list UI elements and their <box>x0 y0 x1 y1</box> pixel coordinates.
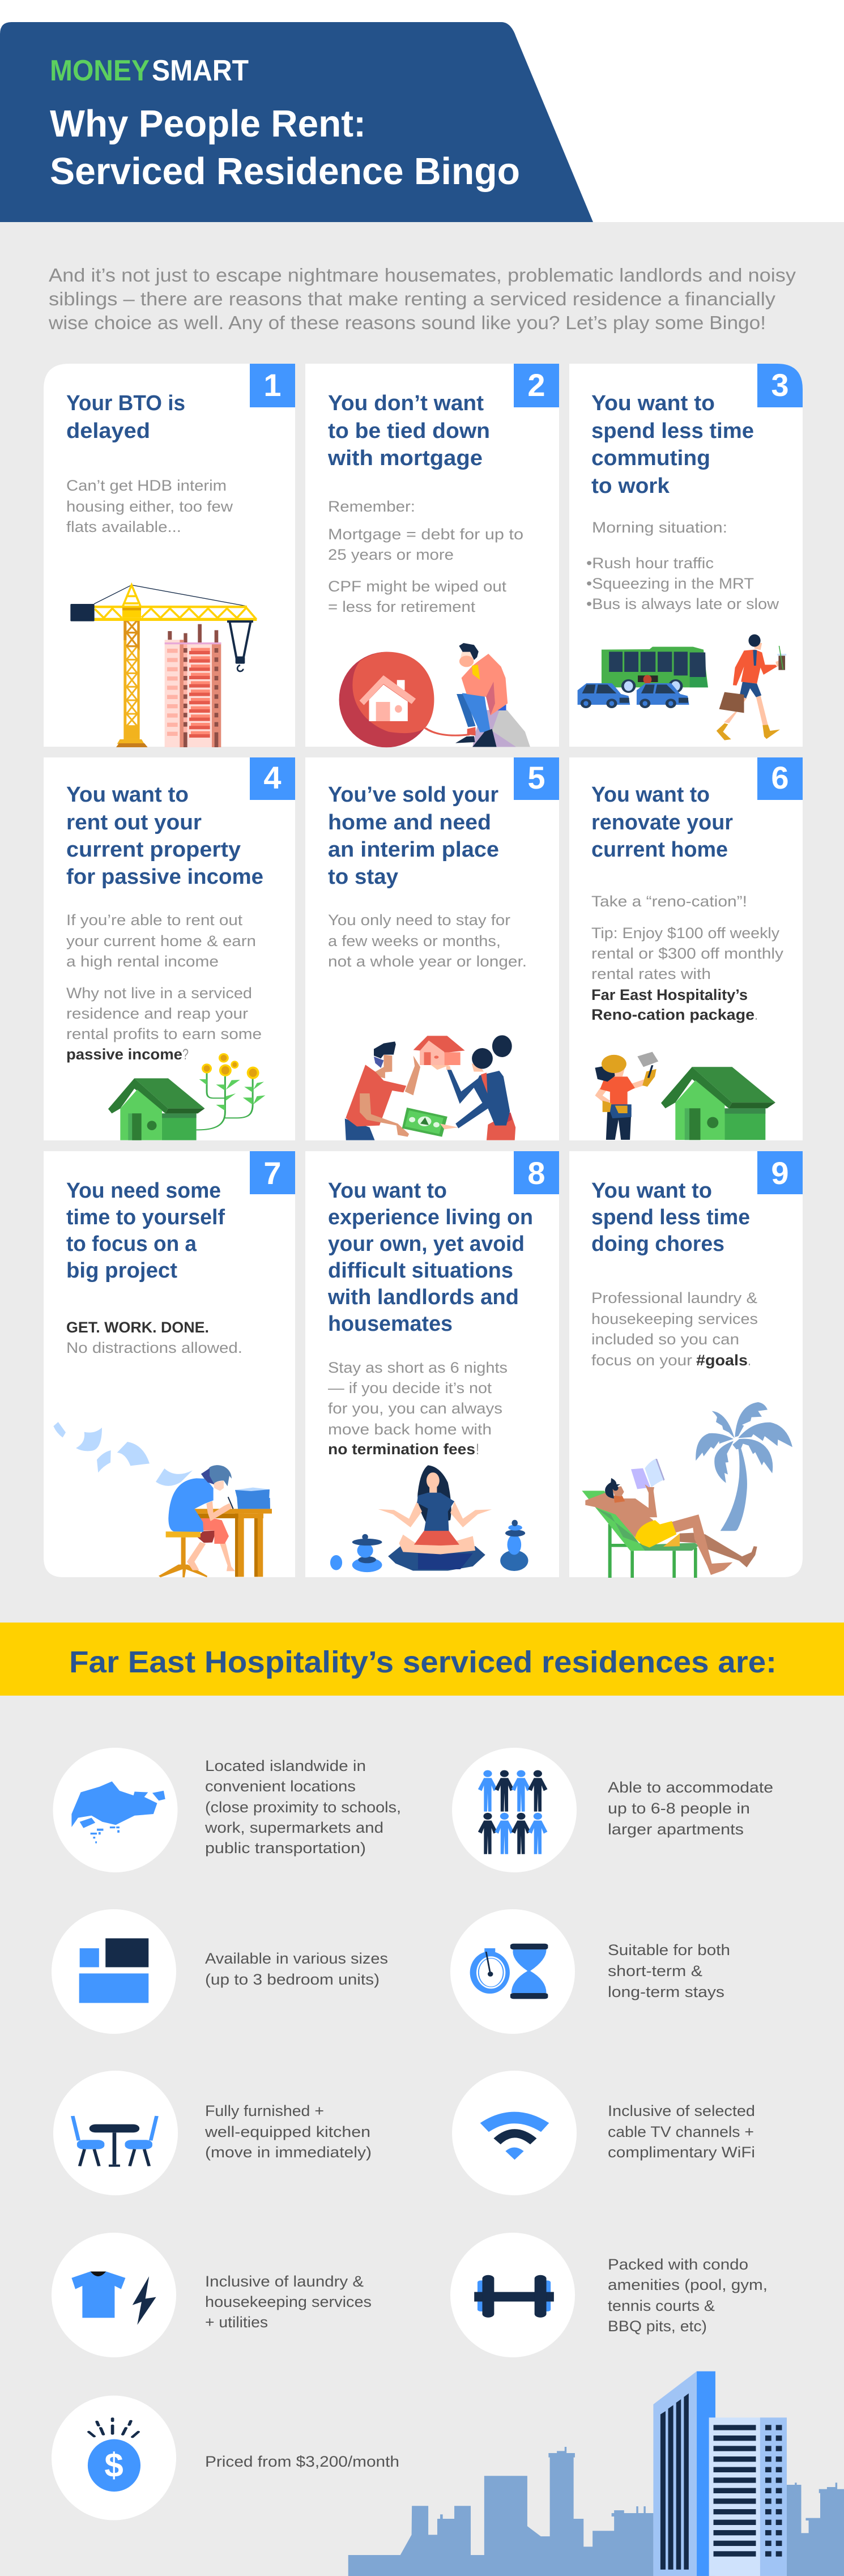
heading: your own, yet avoid <box>328 1232 525 1256</box>
panel: card 8 living on your own <box>305 1151 559 1577</box>
number 9: 9 <box>771 1155 789 1191</box>
body text <box>66 912 262 1063</box>
text: Inclusive of laundry & <box>205 2273 364 2290</box>
body text: No distractions allowed. <box>66 1339 242 1356</box>
text <box>608 2102 755 2161</box>
intro paragraph: wise choice as well. Any of these reasons sound like you? Let’s play some Bingo! <box>48 312 766 333</box>
text: larger apartments <box>608 1821 744 1838</box>
text <box>205 2273 372 2331</box>
text: tennis courts & <box>608 2297 715 2314</box>
text: Located islandwide in <box>205 1757 366 1774</box>
intro paragraph: And it’s not just to escape nightmare housemates, problematic landlords and noisy <box>49 265 796 286</box>
feature: price <box>52 2395 399 2520</box>
body text: You only need to stay for <box>328 912 510 929</box>
heading: an interim place <box>328 838 499 862</box>
panel: card 5 interim place <box>305 757 559 1140</box>
intro paragraph <box>48 265 796 333</box>
text: housekeeping services <box>205 2293 372 2310</box>
icon: renovation worker and green house <box>595 1052 775 1140</box>
heading: current property <box>66 838 241 862</box>
body text: 25 years or more <box>328 546 454 563</box>
heading <box>66 391 185 443</box>
heading: You want to <box>66 783 189 807</box>
heading: home and need <box>328 811 491 834</box>
number 9 <box>757 1151 803 1194</box>
body text: included so you can <box>591 1331 739 1348</box>
body text: •Squeezing in the MRT <box>586 575 754 592</box>
heading: You want to <box>591 1179 712 1203</box>
text: long-term stays <box>608 1983 724 2000</box>
text: cable TV channels + <box>608 2123 754 2140</box>
header banner <box>0 22 593 222</box>
icon: two people exchanging a house and money <box>345 1035 515 1140</box>
heading: doing chores <box>591 1232 724 1256</box>
body text: Take a “reno-cation”! <box>591 893 747 910</box>
body text: = less for retirement <box>328 598 476 615</box>
logo <box>50 54 249 87</box>
body text <box>66 477 233 535</box>
number 3: 3 <box>771 367 789 403</box>
intro paragraph: siblings – there are reasons that make renting a serviced residence a financially <box>49 288 776 309</box>
heading: to focus on a <box>66 1232 197 1256</box>
feature: short and long term stays <box>450 1909 730 2034</box>
text: up to 6-8 people in <box>608 1800 750 1817</box>
text: Fully furnished + <box>205 2102 324 2119</box>
text <box>204 1757 401 1857</box>
body text: . <box>748 1352 751 1369</box>
feature: condo amenities <box>450 2233 768 2357</box>
body text: housekeeping services <box>591 1310 758 1327</box>
title <box>50 103 520 193</box>
body text: rental rates with <box>591 965 711 982</box>
body text: . <box>755 1006 758 1023</box>
body text: CPF might be wiped out <box>328 578 507 595</box>
panel: card 1 BTO delayed <box>44 364 295 747</box>
panel: card 7 big project <box>44 1151 295 1577</box>
body text: •Rush hour traffic <box>586 555 714 572</box>
body text <box>328 1359 508 1458</box>
feature: cable TV and WiFi <box>452 2071 755 2195</box>
body text: move back home with <box>328 1421 492 1438</box>
text: BBQ pits, etc) <box>608 2318 707 2335</box>
heading: for passive income <box>66 865 263 889</box>
number 3 <box>757 364 803 407</box>
heading <box>327 1179 533 1336</box>
body text: a few weeks or months, <box>328 933 501 949</box>
heading: spend less time <box>591 1206 750 1229</box>
heading: to stay <box>328 865 398 889</box>
title: Why People Rent: <box>50 103 366 145</box>
feature: islandwide locations <box>53 1748 401 1872</box>
text: + utilities <box>205 2314 268 2331</box>
icon: dumbbell <box>450 2233 575 2357</box>
body text: Mortgage = debt for up to <box>328 526 523 543</box>
number 8: 8 <box>527 1155 545 1191</box>
icon: t-shirt and lightning <box>52 2233 176 2357</box>
text: Suitable for both <box>608 1941 730 1958</box>
body text: #goals <box>696 1352 748 1369</box>
heading: You’ve sold your <box>328 783 498 807</box>
text: complimentary WiFi <box>608 2144 755 2161</box>
text <box>608 2256 768 2335</box>
body text: Tip: Enjoy $100 off weekly <box>591 925 780 942</box>
body text: GET. WORK. DONE. <box>66 1319 209 1336</box>
yellow section banner <box>0 1623 844 1696</box>
heading <box>591 391 754 498</box>
heading: spend less time <box>591 419 754 443</box>
heading: time to yourself <box>66 1206 225 1229</box>
body text: Far East Hospitality’s <box>591 986 748 1003</box>
panel: card 9 chores <box>569 1151 803 1578</box>
heading <box>66 783 263 889</box>
feature: various sizes <box>52 1909 388 2034</box>
body text <box>66 1319 242 1356</box>
text: well-equipped kitchen <box>204 2123 370 2140</box>
icon: Singapore map <box>53 1748 178 1872</box>
body text: flats available... <box>66 518 181 535</box>
text: (up to 3 bedroom units) <box>205 1971 380 1988</box>
number 4 <box>250 757 295 800</box>
icon: stopwatch and hourglass <box>450 1909 575 2034</box>
number 2: 2 <box>527 367 545 403</box>
text <box>204 2102 372 2161</box>
body text: not a whole year or longer. <box>328 953 527 970</box>
text: Available in various sizes <box>205 1950 388 1967</box>
icon: dollar coin <box>52 2395 176 2520</box>
body text: a high rental income <box>66 953 219 970</box>
feature: accommodates 6-8 people <box>452 1748 773 1872</box>
heading: with landlords and <box>327 1285 519 1309</box>
number 1 <box>250 364 295 407</box>
panel: card 4 passive income <box>44 757 295 1140</box>
icon: wifi <box>452 2071 577 2195</box>
text <box>608 1941 730 2000</box>
text: amenities (pool, gym, <box>608 2276 768 2293</box>
panel: card 6 renovate <box>569 757 803 1140</box>
text: convenient locations <box>205 1778 356 1795</box>
number 5: 5 <box>527 760 545 795</box>
heading: You want to <box>591 783 710 807</box>
number 1: 1 <box>263 367 282 403</box>
heading: Your BTO is <box>66 391 185 415</box>
text: Priced from $3,200/month <box>205 2453 399 2470</box>
city skyline with towers <box>348 2371 844 2576</box>
text: Inclusive of selected <box>608 2102 755 2119</box>
body text: If you’re able to rent out <box>66 912 243 929</box>
heading: big project <box>66 1259 177 1283</box>
heading: difficult situations <box>328 1259 513 1283</box>
text <box>205 1950 388 1988</box>
body text: Can’t get HDB interim <box>66 477 227 494</box>
icon: table and chairs <box>53 2071 178 2195</box>
heading: delayed <box>66 419 150 443</box>
body text <box>591 1289 758 1369</box>
body text: rental profits to earn some <box>66 1025 262 1042</box>
body text: ? <box>182 1046 189 1063</box>
panel: card 2 mortgage <box>305 364 559 747</box>
feature: fully furnished <box>53 2071 372 2195</box>
logo: SMART <box>152 54 249 87</box>
body text <box>328 912 527 970</box>
body text: Morning situation: <box>592 519 727 536</box>
heading: current home <box>591 838 728 862</box>
text <box>608 1779 773 1838</box>
text: short-term & <box>608 1962 702 1979</box>
logo: MONEY <box>50 54 150 87</box>
body text: Professional laundry & <box>591 1289 757 1306</box>
heading: experience living on <box>328 1206 533 1229</box>
heading: You don’t want <box>328 391 484 415</box>
icon: meditating woman with stacked stones <box>330 1465 528 1572</box>
text: (close proximity to schools, <box>205 1799 401 1816</box>
number 2 <box>514 364 559 407</box>
icon: dollar coin: $ <box>104 2446 123 2484</box>
icon: man reading on deck chair under palm tree <box>582 1402 792 1578</box>
yellow section banner: Far East Hospitality’s serviced residences are: <box>69 1645 777 1679</box>
heading <box>591 1179 750 1256</box>
heading: You want to <box>591 391 715 415</box>
icon: floor plan blocks <box>52 1909 176 2034</box>
icon: person working at desk with flying papers <box>53 1422 272 1577</box>
text: Packed with condo <box>608 2256 748 2273</box>
body text: •Bus is always late or slow <box>586 595 779 612</box>
body text: ! <box>476 1441 479 1458</box>
number 6 <box>757 757 803 800</box>
heading <box>591 783 733 862</box>
icon: green house with money plant <box>108 1053 265 1140</box>
body text: passive income <box>66 1046 182 1063</box>
body text: focus on your <box>591 1352 692 1369</box>
heading: rent out your <box>66 811 202 834</box>
body text: no termination fees <box>328 1441 475 1458</box>
heading: commuting <box>591 446 710 470</box>
body text: Why not live in a serviced <box>66 985 252 1002</box>
icon: bus cars and commuter <box>578 635 786 740</box>
icon: crane and building <box>70 585 257 747</box>
text: (move in immediately) <box>205 2144 372 2161</box>
body text: residence and reap your <box>66 1005 248 1022</box>
body text: rental or $300 off monthly <box>591 945 784 962</box>
body text: Reno-cation package <box>591 1006 755 1023</box>
number 7: 7 <box>263 1155 282 1191</box>
body text <box>591 893 784 1023</box>
heading: housemates <box>328 1312 453 1336</box>
body text: for you, you can always <box>328 1400 502 1417</box>
number 5 <box>514 757 559 800</box>
heading: to work <box>591 474 670 498</box>
heading: You want to <box>328 1179 447 1203</box>
body text <box>328 498 523 615</box>
text: work, supermarkets and <box>204 1819 383 1836</box>
heading: You need some <box>66 1179 221 1203</box>
text: public transportation) <box>205 1840 366 1857</box>
number 7 <box>250 1151 295 1194</box>
number 4: 4 <box>263 760 282 795</box>
heading: renovate your <box>591 811 733 834</box>
body text: your current home & earn <box>66 933 256 949</box>
body text: Remember: <box>328 498 415 515</box>
heading <box>66 1179 225 1283</box>
number 6: 6 <box>771 760 789 795</box>
icon: man chained to house ball <box>339 643 530 747</box>
text: Able to accommodate <box>608 1779 773 1796</box>
panel: card 3 commute <box>569 364 803 747</box>
feature: laundry and utilities <box>52 2233 372 2357</box>
body text: Stay as short as 6 nights <box>328 1359 508 1376</box>
number 8 <box>514 1151 559 1194</box>
body text <box>586 519 779 612</box>
body text: — if you decide it’s not <box>328 1379 492 1396</box>
heading <box>327 391 490 470</box>
icon: group of people <box>452 1748 577 1872</box>
heading: to be tied down <box>328 419 490 443</box>
title: Serviced Residence Bingo <box>50 150 520 193</box>
body text: housing either, too few <box>66 498 233 515</box>
heading <box>328 783 499 889</box>
heading: with mortgage <box>327 446 483 470</box>
